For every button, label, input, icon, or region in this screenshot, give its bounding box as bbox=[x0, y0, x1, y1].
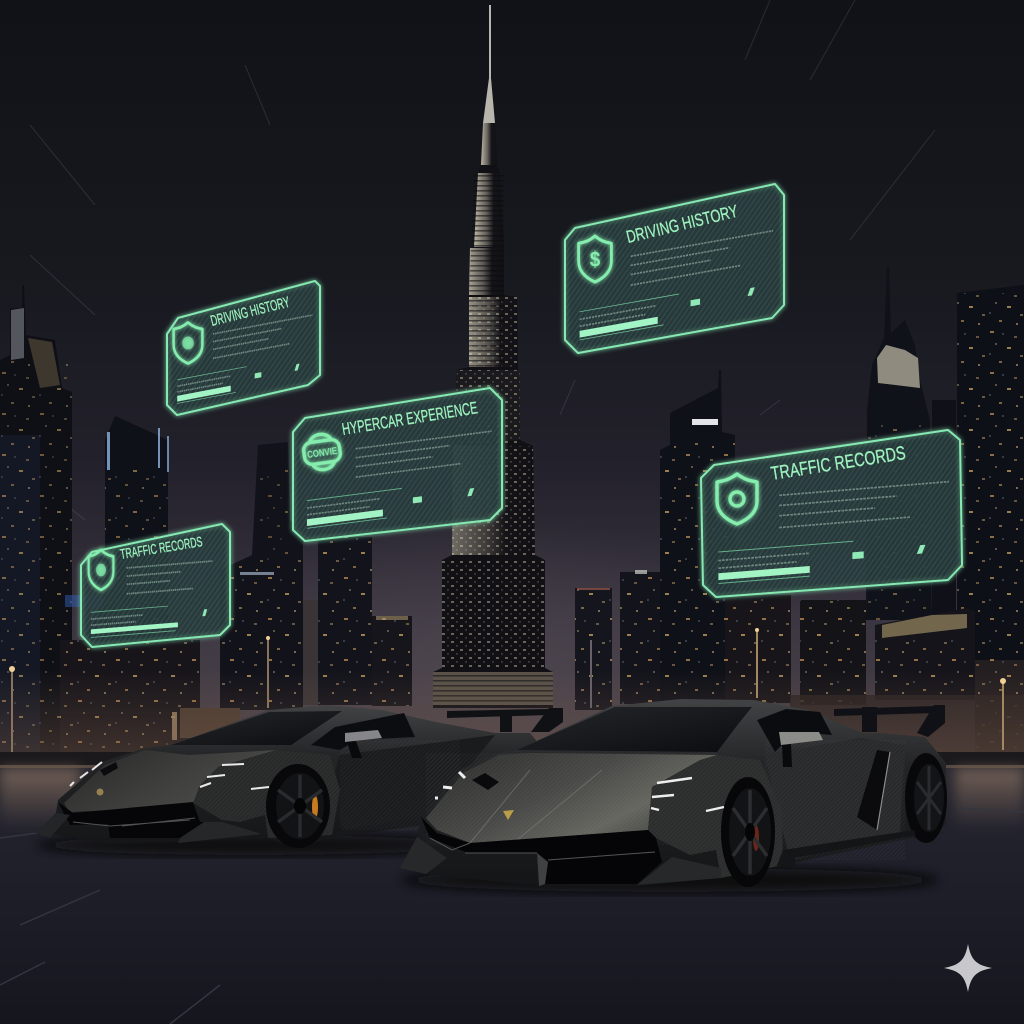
body details bbox=[718, 482, 949, 584]
left car side windows bbox=[311, 713, 415, 750]
right car side panel bbox=[765, 738, 905, 860]
sports car: right bbox=[400, 699, 947, 892]
right car side intake bbox=[857, 750, 890, 830]
badge icon: CONVIE bbox=[307, 446, 338, 461]
right car mirror bbox=[779, 732, 823, 767]
panel: traffic records (large, right) bbox=[701, 430, 962, 597]
right car intake bbox=[421, 817, 662, 884]
right car windshield bbox=[517, 707, 752, 752]
right car rear wheel bbox=[905, 753, 947, 843]
left car body bbox=[36, 705, 540, 848]
shield icon bbox=[579, 236, 611, 282]
central skyscraper bbox=[433, 5, 553, 708]
left car wheel bbox=[266, 764, 330, 848]
right car body bbox=[400, 699, 946, 886]
body details bbox=[307, 431, 492, 528]
right car front fender bbox=[648, 755, 783, 878]
left car intake bbox=[58, 802, 222, 838]
body details bbox=[177, 315, 312, 404]
body details bbox=[580, 231, 773, 340]
right car hood bbox=[426, 753, 717, 843]
sports car: left bbox=[35, 705, 563, 855]
warm street haze bbox=[0, 628, 1024, 760]
skyline: left buildings bbox=[0, 285, 412, 760]
panel heading: TRAFFIC RECORDS bbox=[119, 533, 203, 562]
panel: traffic records (small, left) bbox=[81, 524, 230, 647]
right car side windows bbox=[757, 709, 832, 752]
left car front fender bbox=[193, 750, 340, 838]
left car side panel bbox=[330, 735, 495, 830]
right car lights and badge bbox=[435, 772, 724, 820]
panel: driving history (small, left) bbox=[167, 281, 320, 415]
shield icon bbox=[89, 550, 113, 590]
right car front wheel bbox=[721, 777, 775, 887]
right car rear wing bbox=[834, 705, 945, 737]
badge icon bbox=[302, 432, 342, 472]
panel heading: HYPERCAR EXPERIENCE bbox=[341, 398, 479, 439]
shield icon bbox=[174, 322, 202, 364]
panel heading: TRAFFIC RECORDS bbox=[769, 443, 907, 485]
shield icon: $ bbox=[590, 248, 600, 272]
shield icon bbox=[717, 474, 757, 524]
left car windshield bbox=[171, 711, 342, 745]
panel: hypercar experience (center) bbox=[293, 388, 502, 541]
panel heading: DRIVING HISTORY bbox=[624, 201, 740, 247]
wet ground bbox=[0, 752, 1024, 1024]
icon: sparkle watermark bbox=[944, 944, 992, 992]
right car sill bbox=[776, 830, 916, 868]
left car rear wing bbox=[447, 708, 563, 732]
left car lights and badge bbox=[70, 762, 269, 796]
panel: driving history (large, top right) bbox=[565, 184, 784, 353]
skyline: right buildings bbox=[575, 267, 1024, 755]
panel heading: DRIVING HISTORY bbox=[209, 294, 292, 330]
left car mirror bbox=[345, 730, 382, 758]
body details bbox=[91, 561, 213, 637]
left car hood bbox=[64, 750, 276, 812]
